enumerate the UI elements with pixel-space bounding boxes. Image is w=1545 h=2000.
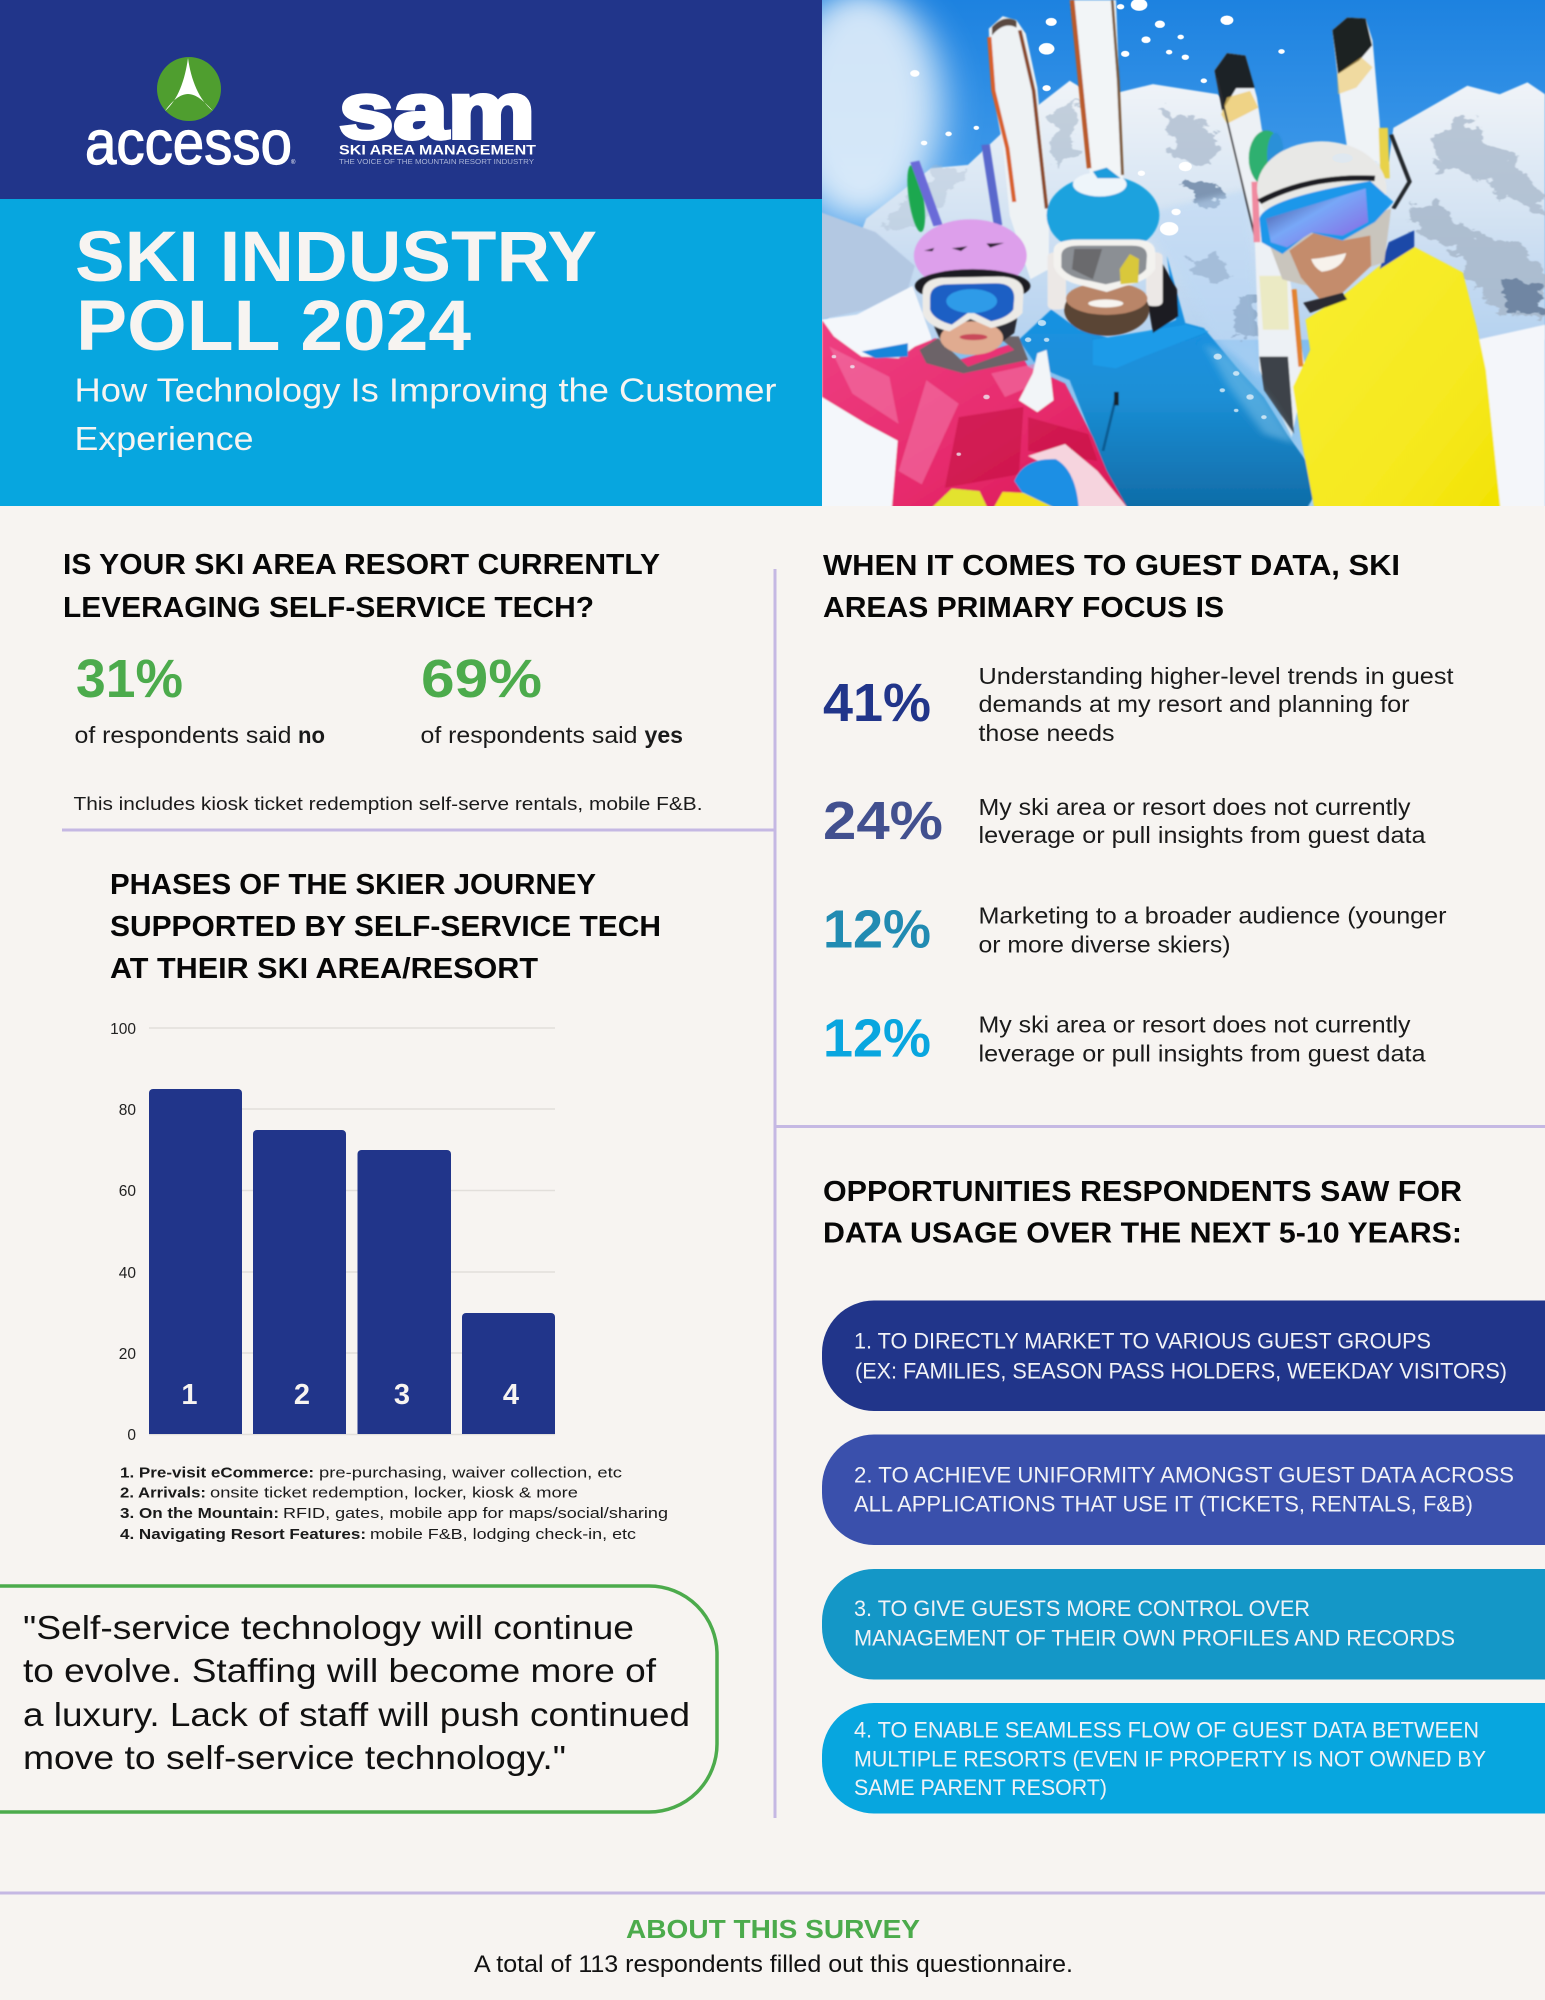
heading: guest data: WHEN IT COMES TO GUEST DATA, SKI <box>823 550 1400 582</box>
pill 4: MULTIPLE RESORTS (EVEN IF PROPERTY IS NOT OWNED BY <box>854 1746 1486 1772</box>
bar chart: 20 <box>119 1346 136 1363</box>
heading: self-service tech: IS YOUR SKI AREA RESORT CURRENTLY <box>63 549 660 581</box>
panel: self-service tech poll <box>63 549 702 814</box>
chart legend: RFID, gates, mobile app for maps/social/sharing <box>283 1505 668 1522</box>
footer: about this survey: A total of 113 respondents filled out this questionnaire. <box>474 1951 1073 1978</box>
stat: 41 percent: Understanding higher-level trends in guest <box>978 663 1454 689</box>
bar chart: 4 <box>503 1379 519 1411</box>
stat: 41 percent: demands at my resort and planning for <box>978 691 1410 717</box>
man <box>1019 256 1322 511</box>
stat: 12 percent marketing: Marketing to a broader audience (younger <box>978 902 1447 928</box>
stat: 41 percent: 41% <box>823 673 931 733</box>
header band: light blue title area <box>0 199 822 506</box>
pill 2: 2. TO ACHIEVE UNIFORMITY AMONGST GUEST DATA ACROSS <box>854 1462 1514 1488</box>
heading: phases: PHASES OF THE SKIER JOURNEY <box>110 869 596 901</box>
stat: 24 percent: 24% <box>823 791 943 851</box>
chart legend: 1. Pre-visit eCommerce: <box>120 1464 314 1482</box>
callout: quote <box>0 1586 717 1812</box>
chart legend: mobile F&B, lodging check-in, etc <box>370 1526 637 1543</box>
chart legend: 2. Arrivals: <box>120 1484 206 1502</box>
subtitle: How Technology Is Improving the Customer <box>74 372 777 408</box>
heading: opportunities: OPPORTUNITIES RESPONDENTS SAW FOR <box>823 1176 1462 1208</box>
stat: 12 percent no insights: leverage or pull insights from guest data <box>978 1040 1426 1066</box>
pill 4 <box>822 1703 1545 1814</box>
skis <box>989 16 1049 279</box>
pill 4: SAME PARENT RESORT) <box>854 1775 1107 1800</box>
pill 1 <box>822 1300 1545 1411</box>
heading: phases <box>110 869 661 985</box>
pill 1: (EX: FAMILIES, SEASON PASS HOLDERS, WEEKDAY VISITORS) <box>855 1358 1507 1384</box>
stat: 69 percent yes: 69% <box>421 649 542 709</box>
bar chart: 3 <box>394 1379 410 1411</box>
stat: 69 percent yes: of respondents said <box>420 722 638 748</box>
stat: 12 percent no insights: My ski area or resort does not currently <box>978 1012 1411 1038</box>
divider left <box>62 828 775 832</box>
poles <box>906 164 926 233</box>
bar chart <box>110 1021 555 1444</box>
woman <box>1293 246 1501 511</box>
divider right <box>775 1125 1545 1128</box>
callout: quote: a luxury. Lack of staff will push continued <box>23 1696 690 1733</box>
footer divider <box>0 1892 1545 1894</box>
footer: about this survey <box>474 1914 1073 1978</box>
chart legend <box>120 1464 668 1543</box>
logo: sam ski area management: sam <box>339 66 535 155</box>
heading: guest data: AREAS PRIMARY FOCUS IS <box>823 592 1224 624</box>
stat: 12 percent no insights <box>823 1008 1426 1068</box>
photo: family of skiers on a snowy mountain <box>781 0 1545 511</box>
stat: 31 percent no: 31% <box>76 649 183 709</box>
stat: 24 percent <box>823 791 1426 851</box>
heading: phases: AT THEIR SKI AREA/RESORT <box>110 953 538 985</box>
title: SKI INDUSTRY <box>75 218 597 297</box>
vertical divider <box>774 569 776 1818</box>
bar chart: 0 <box>127 1427 136 1444</box>
chart legend: 3. On the Mountain: <box>120 1505 279 1522</box>
title: POLL 2024 <box>76 287 472 366</box>
bar chart: 100 <box>110 1021 136 1038</box>
callout: quote: to evolve. Staffing will become more of <box>23 1652 657 1689</box>
pill 3 <box>822 1569 1545 1680</box>
callout: quote: move to self-service technology." <box>23 1739 566 1776</box>
bar chart: 60 <box>119 1183 136 1200</box>
header band: dark blue logo area <box>0 0 822 199</box>
header panel <box>0 0 822 506</box>
stat: 41 percent <box>823 663 1454 746</box>
heading: self-service tech: LEVERAGING SELF-SERVICE TECH? <box>63 592 594 624</box>
bar chart: 2 <box>294 1379 310 1411</box>
snow spray <box>781 0 943 219</box>
stat: 12 percent marketing <box>823 900 1447 960</box>
pill 4: 4. TO ENABLE SEAMLESS FLOW OF GUEST DATA BETWEEN <box>854 1718 1479 1742</box>
stat: 24 percent: My ski area or resort does not currently <box>978 794 1411 820</box>
pill 3: MANAGEMENT OF THEIR OWN PROFILES AND RECORDS <box>854 1626 1455 1650</box>
note: This includes kiosk ticket redemption self-serve rentals, mobile F&B. <box>74 793 702 814</box>
title <box>75 218 597 366</box>
stat: 12 percent marketing: 12% <box>823 900 931 960</box>
snow lumps and gloves <box>1019 350 1054 412</box>
stat: 69 percent yes <box>420 649 683 748</box>
panel: opportunities <box>822 1176 1545 1814</box>
heading: opportunities <box>823 1176 1462 1250</box>
stat: 31 percent no: no <box>298 722 325 748</box>
pill 2 <box>822 1434 1545 1545</box>
logo: sam ski area management: THE VOICE OF THE MOUNTAIN RESORT INDUSTRY <box>339 157 534 166</box>
heading: guest data <box>823 550 1400 624</box>
chart legend: pre-purchasing, waiver collection, etc <box>319 1464 623 1482</box>
pill 1: 1. TO DIRECTLY MARKET TO VARIOUS GUEST GROUPS <box>854 1328 1431 1354</box>
child <box>822 320 1129 511</box>
snow flakes <box>910 0 1353 235</box>
subtitle: Experience <box>74 420 254 457</box>
stat: 12 percent marketing: or more diverse skiers) <box>978 932 1230 958</box>
logo: accesso: accesso <box>85 109 292 178</box>
stat: 12 percent no insights: 12% <box>823 1008 931 1068</box>
heading: opportunities: DATA USAGE OVER THE NEXT 5-10 YEARS: <box>823 1218 1462 1250</box>
logo: accesso <box>85 57 296 178</box>
bar chart: 80 <box>119 1102 136 1119</box>
subtitle <box>74 372 777 457</box>
pill 3: 3. TO GIVE GUESTS MORE CONTROL OVER <box>854 1596 1310 1621</box>
footer: about this survey: ABOUT THIS SURVEY <box>626 1914 920 1944</box>
stat: 31 percent no <box>74 649 325 748</box>
chart legend: 4. Navigating Resort Features: <box>120 1526 366 1543</box>
heading: self-service tech <box>63 549 660 624</box>
pill 2: ALL APPLICATIONS THAT USE IT (TICKETS, RENTALS, F&B) <box>854 1492 1473 1516</box>
panel: phases of the skier journey <box>110 869 668 1543</box>
panel: guest data focus <box>823 550 1454 1068</box>
stat: 24 percent: leverage or pull insights from guest data <box>978 822 1426 848</box>
stat: 41 percent: those needs <box>978 720 1114 746</box>
bar chart: 1 <box>181 1379 198 1411</box>
logo: accesso: ® <box>291 159 296 166</box>
logo: sam ski area management: SKI AREA MANAGEMENT <box>339 142 537 158</box>
chart legend: onsite ticket redemption, locker, kiosk & more <box>210 1484 578 1502</box>
stat: 69 percent yes: yes <box>644 722 683 748</box>
bar chart: 40 <box>119 1265 136 1282</box>
stat: 31 percent no: of respondents said <box>74 722 292 748</box>
heading: phases: SUPPORTED BY SELF-SERVICE TECH <box>110 911 661 943</box>
callout: quote: "Self-service technology will continue <box>23 1609 634 1646</box>
